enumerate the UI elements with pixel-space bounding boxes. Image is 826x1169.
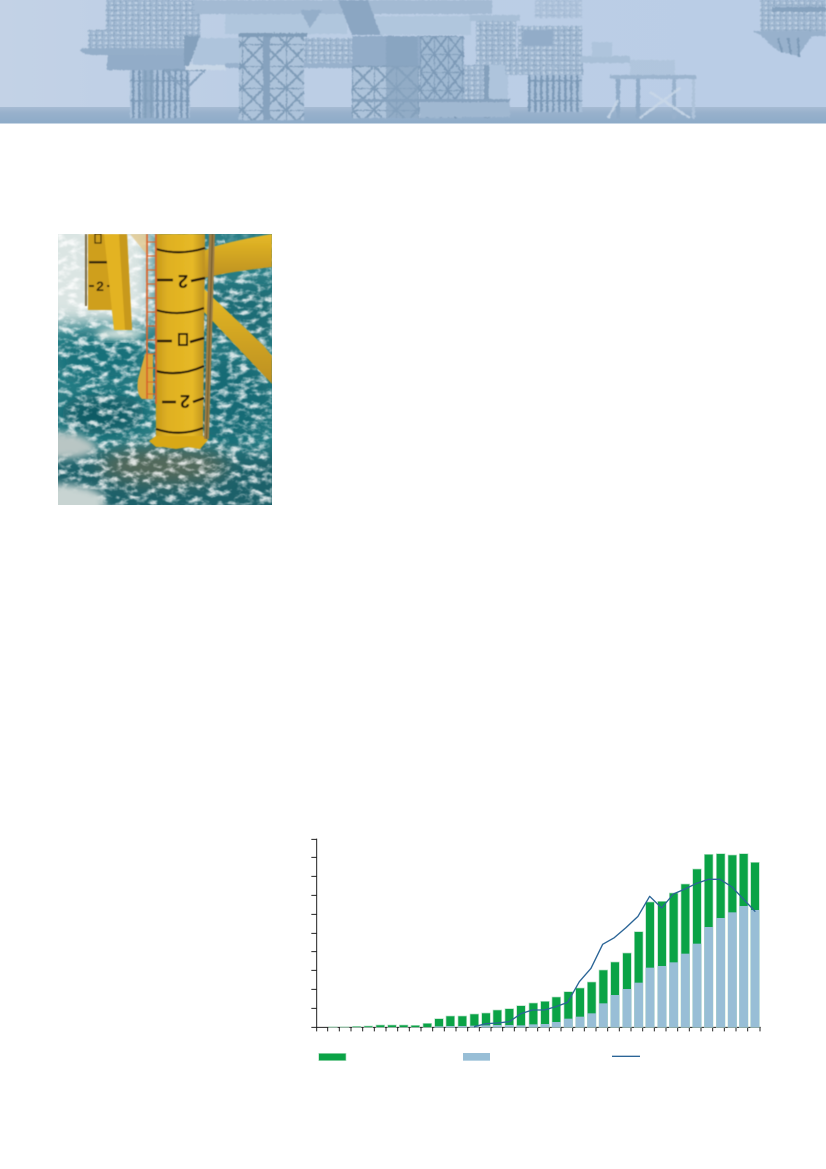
- main column: [149, 234, 208, 449]
- foam patches: [58, 325, 146, 505]
- platforms: [80, 0, 826, 120]
- chart: stacked bars with line: [311, 838, 761, 1061]
- sky: [0, 0, 826, 108]
- trend line: [474, 879, 755, 1027]
- jacket 3: [352, 15, 520, 118]
- column numeral 2: 2: [178, 271, 188, 291]
- platform 5: [608, 60, 696, 119]
- rear column: 2: [96, 278, 104, 294]
- legend: blue swatch: [463, 1053, 490, 1061]
- horizontal right brace: [201, 234, 272, 278]
- green bars: [329, 854, 759, 1027]
- header banner: offshore platforms photo: [0, 0, 826, 124]
- legend: green swatch: [319, 1053, 346, 1061]
- platform 4: [505, 0, 630, 112]
- rear brace: [104, 234, 132, 330]
- ladder brace behind: [130, 234, 147, 254]
- main column: 2: [180, 391, 190, 411]
- water: [58, 234, 272, 505]
- rear column: [85, 234, 112, 310]
- platform 6 right: [752, 0, 826, 57]
- brown rod: [204, 234, 215, 439]
- ladder foot: [138, 354, 153, 399]
- legend: line sample: [612, 1056, 640, 1057]
- sea: [0, 107, 826, 124]
- top structure and central modules: [195, 0, 492, 68]
- blue bars: [435, 906, 759, 1027]
- platform 1: [80, 0, 239, 118]
- orange ladder: [147, 234, 156, 404]
- jacket 2: [239, 33, 307, 120]
- diagonal right brace: [204, 289, 272, 384]
- axes: [311, 839, 761, 1031]
- photo: yellow platform column in the sea: [58, 234, 272, 505]
